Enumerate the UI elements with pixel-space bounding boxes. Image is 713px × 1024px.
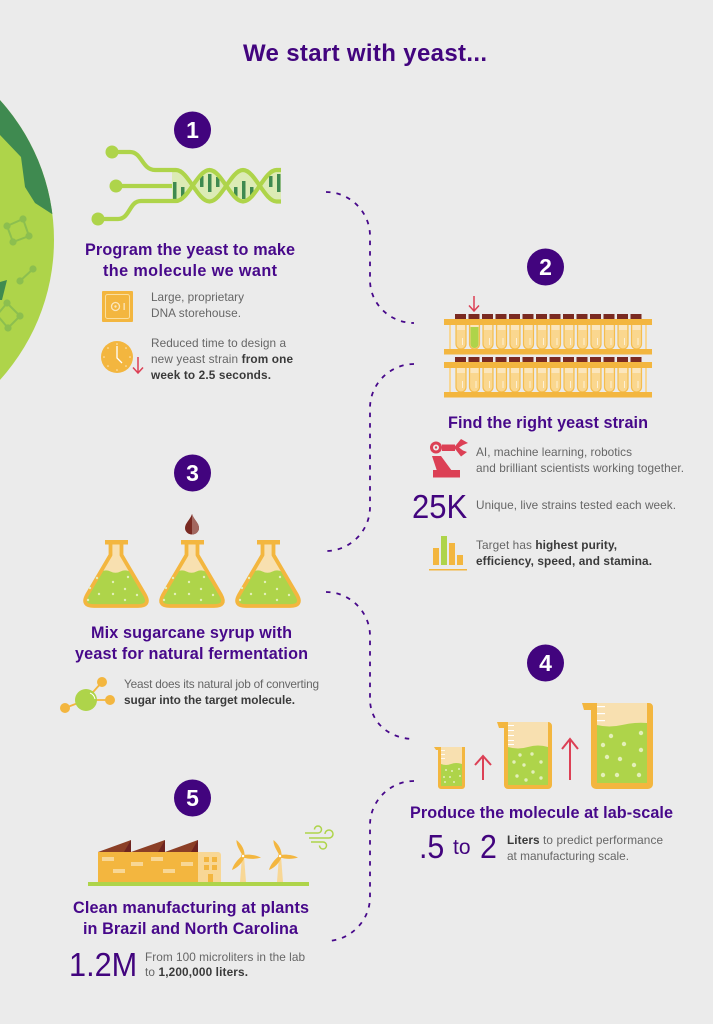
- text: scale up: [145, 950, 305, 979]
- dashed connector 1 to 2: [326, 192, 414, 323]
- step number 3: [174, 454, 211, 492]
- step number 5: 5: [186, 785, 199, 811]
- panel: step 3: [60, 454, 319, 713]
- dashed connector 2 to 3: [326, 364, 414, 551]
- arrow: medium to large: [562, 739, 578, 780]
- heading: step 1: [85, 241, 295, 280]
- stat: .5 to 2: .5: [419, 828, 444, 865]
- heading: step 3: Mix sugarcane syrup with: [91, 624, 292, 642]
- step number 4: [527, 644, 564, 682]
- heading: step 3: yeast for natural fermentation: [75, 645, 308, 663]
- step number 4: 4: [539, 650, 552, 676]
- heading: step 5: in Brazil and North Carolina: [83, 920, 299, 938]
- ground: [88, 882, 309, 886]
- icon: clock with down arrow: [101, 341, 143, 373]
- text: DNA storehouse: [151, 290, 244, 320]
- text: target qualities: efficiency, speed, and stamina.: [476, 554, 652, 568]
- heading: step 2: Find the right yeast strain: [448, 414, 648, 432]
- icon: medium beaker: [497, 722, 552, 789]
- arrow: small to medium: [475, 756, 491, 780]
- text: reduced design time: new yeast strain from one: [151, 352, 293, 366]
- text: scale up: to 1,200,000 liters.: [145, 965, 248, 979]
- icon: wind: [305, 826, 333, 849]
- icon: test tube racks: [444, 296, 652, 398]
- heading: step 5: [73, 899, 309, 938]
- text: DNA storehouse: DNA storehouse.: [151, 306, 241, 320]
- icon: bar chart: [429, 536, 467, 570]
- text: reduced design time: [150, 336, 293, 382]
- heading: step 1: Program the yeast to make: [85, 241, 295, 259]
- text: reduced design time: Reduced time to design a: [151, 336, 286, 350]
- icon: robot arm: [430, 439, 468, 478]
- planet molecules: [0, 215, 37, 332]
- text: scale up: From 100 microliters in the lab: [145, 950, 305, 964]
- text: DNA storehouse: Large, proprietary: [151, 290, 244, 304]
- stat: 1.2M: 1.2M: [69, 946, 137, 983]
- step number 1: 1: [186, 117, 199, 143]
- heading: step 3: [75, 624, 308, 663]
- stat: .5 to 2: to: [453, 836, 471, 859]
- icon: wind turbines: [232, 840, 298, 882]
- step number 3: 3: [186, 460, 199, 486]
- stat: .5 to 2: 2: [480, 828, 497, 865]
- heading: step 4: Produce the molecule at lab-scale: [410, 804, 673, 822]
- text: liters: at manufacturing scale.: [507, 849, 629, 863]
- text: AI and robotics: AI, machine learning, robotics: [476, 445, 632, 459]
- panel: step 2: [412, 248, 684, 570]
- icon: small beaker: [434, 747, 465, 789]
- text: liters: [507, 833, 663, 863]
- step number 2: [527, 248, 564, 286]
- icon: syrup drop: [185, 514, 199, 534]
- text: liters: Liters to predict performance: [507, 833, 663, 847]
- text: AI and robotics: and brilliant scientists working together.: [476, 461, 684, 475]
- icon: large beaker: [582, 703, 653, 789]
- stat: 25K: 25K: [412, 488, 467, 525]
- icon: molecule: [60, 677, 115, 713]
- step number 2: 2: [539, 254, 552, 280]
- text: yeast converts sugar: sugar into the target molecule.: [124, 693, 295, 707]
- icon: DNA helix: [92, 146, 281, 226]
- icon: three flasks: [85, 540, 299, 606]
- text: strains tested: Unique, live strains tested each week.: [476, 498, 676, 512]
- dashed connector 3 to 4: [326, 592, 414, 739]
- text: reduced design time: week to 2.5 seconds.: [150, 368, 271, 382]
- icon: safe: [102, 291, 133, 322]
- text: yeast converts sugar: Yeast does its natural job of converting: [124, 677, 319, 691]
- illustration: green planet: [0, 100, 54, 380]
- title: We start with yeast...: [243, 40, 487, 67]
- panel: step 5: [69, 780, 333, 983]
- text: target qualities: [476, 538, 652, 568]
- dashed connector 4 to 5: [326, 781, 414, 941]
- heading: step 1: the molecule we want: [103, 262, 278, 280]
- panel: step 1: [85, 112, 295, 382]
- text: target qualities: Target has highest purity,: [476, 538, 617, 552]
- text: yeast converts sugar: [124, 677, 319, 707]
- stat: .5 to 2: [419, 828, 497, 865]
- step number 5: [174, 780, 211, 816]
- planet land mass: [0, 100, 52, 214]
- panel: step 4: [410, 644, 673, 865]
- step number 1: [174, 112, 211, 148]
- heading: step 5: Clean manufacturing at plants: [73, 899, 309, 917]
- text: AI and robotics: [476, 445, 684, 475]
- icon: factory: [98, 840, 221, 882]
